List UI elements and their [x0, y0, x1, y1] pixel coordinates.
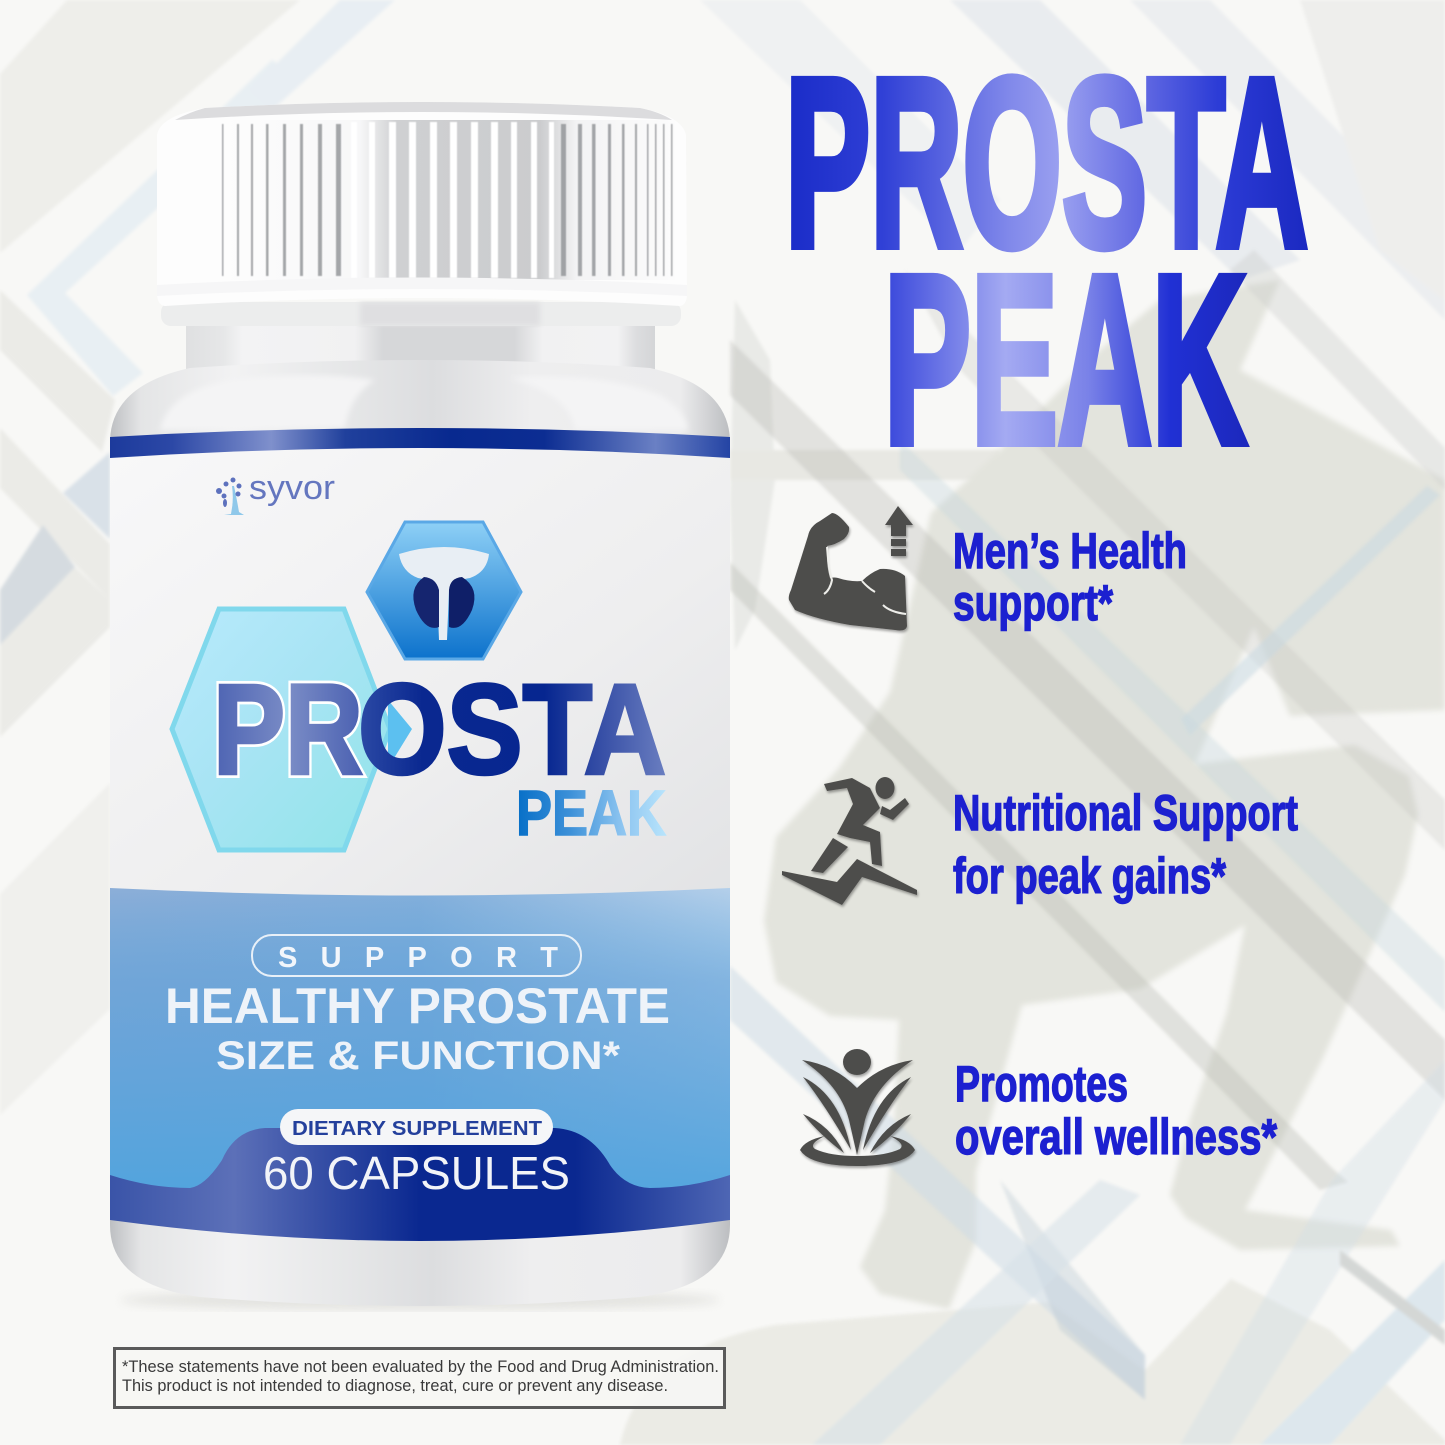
text: support*: [953, 575, 1113, 631]
icon: runner: [782, 777, 917, 905]
capsule count: 60 CAPSULES: [263, 1147, 570, 1199]
claim: size and function: SIZE & FUNCTION*: [216, 1034, 620, 1078]
icon: flexed arm with up arrow: [789, 506, 913, 630]
logo word PROSTA: OSTA: [358, 658, 666, 802]
text: [955, 1056, 1277, 1165]
icon: small prostate hexagon: [367, 522, 521, 659]
title: [785, 28, 1308, 494]
bottle cap: [157, 102, 687, 326]
muscle definition lines: [824, 547, 906, 614]
brand: syvor: [216, 469, 335, 515]
disclaimer box: [114, 1348, 724, 1408]
background: exercising man silhouette: [764, 280, 1445, 1309]
logo word PROSTA: PR: [213, 658, 363, 802]
text: for peak gains*: [953, 848, 1226, 904]
product bottle: [110, 102, 730, 1310]
top blue band: [110, 428, 730, 458]
text: Men’s Health: [953, 523, 1187, 579]
bottle body: [110, 360, 730, 1306]
feature: nutritional support: [782, 777, 1298, 905]
dietary supplement pill: [280, 1109, 553, 1145]
blue panel: [110, 888, 730, 1200]
support pill: SUPPORT: [278, 942, 558, 974]
label white area: [110, 448, 730, 900]
text: [953, 785, 1298, 904]
label: [110, 428, 730, 1241]
shoulder highlights: [160, 375, 375, 430]
syvor wordmark: syvor: [249, 469, 335, 507]
icon: wellness figure: [800, 1049, 915, 1166]
feature: men's health: [789, 506, 1187, 631]
disclaimer box: *These statements have not been evaluated by the Food and Drug Administration.: [122, 1358, 719, 1376]
bottom dark band with hump: [110, 1128, 730, 1241]
logo word PROSTA: PR: [213, 658, 363, 802]
claim: healthy prostate: HEALTHY PROSTATE: [165, 978, 670, 1034]
cap ribs: [222, 122, 672, 278]
text: Nutritional Support: [953, 785, 1298, 841]
bottle neck: [186, 322, 655, 382]
feature: overall wellness: [800, 1049, 1277, 1166]
logo word PROSTA: [213, 658, 666, 802]
logo word PEAK: PEAK: [516, 777, 666, 849]
disclaimer box: This product is not intended to diagnose, treat, cure or prevent any disease.: [122, 1377, 668, 1395]
icon: large hexagon: [172, 609, 390, 850]
icon: tree logo: [216, 478, 244, 515]
text: [953, 523, 1187, 631]
text: overall wellness*: [955, 1109, 1277, 1165]
text: Promotes: [955, 1056, 1128, 1112]
support pill: [252, 935, 581, 976]
dietary supplement pill: DIETARY SUPPLEMENT: [292, 1118, 542, 1140]
bottle shadow: [120, 1290, 720, 1310]
